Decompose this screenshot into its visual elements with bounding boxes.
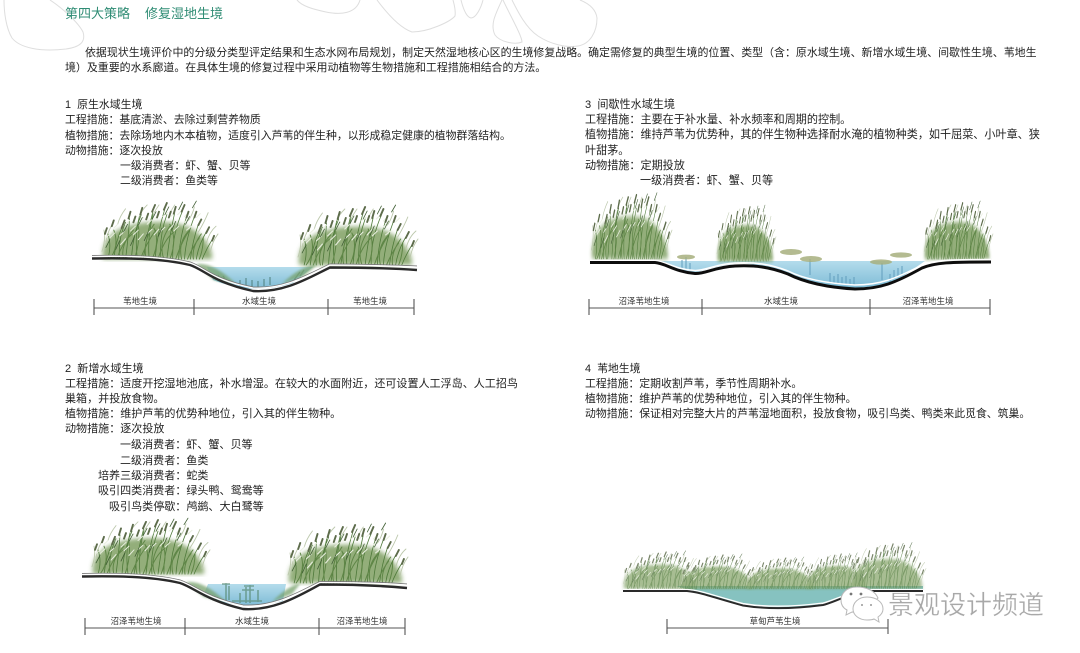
text block: section 2: 植物措施：维护芦苇的优势种地位，引入其的伴生物种。 — [65, 408, 341, 420]
text block: section 2: 二级消费者：鱼类 — [120, 455, 208, 467]
scale bar 1: 苇地生境 — [123, 296, 157, 306]
diagram 4: reed habitat section — [623, 542, 926, 634]
intro paragraph — [65, 46, 1037, 74]
text block: section 2 — [65, 362, 518, 513]
watermark: channel name: 景观设计频道 — [888, 590, 1044, 620]
scale bar 1: 水域生境 — [242, 296, 276, 306]
scale bar 2 — [85, 616, 405, 635]
scale bar 3: 沼泽苇地生境 — [902, 296, 954, 306]
text block: section 4: 植物措施：维护芦苇的优势种地位，引入其的伴生物种。 — [585, 393, 856, 405]
text block: section 3: 3 间歇性水域生境 — [585, 99, 675, 111]
text block: section 2: 吸引四类消费者：绿头鸭、鸳鸯等 — [98, 485, 264, 497]
reeds left 3 — [591, 193, 672, 259]
text block: section 3: 一级消费者：虾、蟹、贝等 — [640, 175, 773, 187]
reeds left bank 1 — [102, 201, 218, 259]
text block: section 4: 动物措施：保证相对完整大片的芦苇湿地面积，投放食物，吸引鸟类、鸭类来此觅食、筑巢。 — [585, 408, 1030, 420]
text block: section 3: 工程措施：主要在于补水量、补水频率和周期的控制。 — [585, 114, 851, 126]
submerged plants 3 — [682, 257, 902, 285]
ground line 3 — [590, 260, 991, 289]
ground line 1 — [92, 255, 417, 291]
ground line 4 — [623, 590, 923, 608]
scale bar 3: 沼泽苇地生境 — [618, 296, 670, 306]
scale bar 2: 沼泽苇地生境 — [110, 616, 162, 626]
text block: section 2: 工程措施：适度开挖湿地池底，补水增湿。在较大的水面附近，还可设置人工浮岛、人工招鸟 — [65, 378, 518, 390]
scale bar 4 — [667, 616, 888, 634]
reeds right bank 2 — [288, 523, 408, 583]
text block: section 2: 一级消费者：虾、蟹、贝等 — [120, 439, 253, 451]
reed belt 4 — [623, 542, 926, 589]
scale bar 1: 苇地生境 — [353, 296, 387, 306]
text block: section 1: 1 原生水域生境 — [65, 99, 142, 111]
lily pads 3 — [677, 249, 912, 265]
intro paragraph: 境）及重要的水系廊道。在具体生境的修复过程中采用动植物等生物措施和工程措施相结合的方法。 — [65, 62, 546, 74]
text block: section 1: 植物措施：去除场地内木本植物，适度引入芦苇的伴生种，以形成稳定健康的植物群落结构。 — [65, 130, 511, 142]
scale bar 2: 沼泽苇地生境 — [336, 616, 388, 626]
text block: section 1: 工程措施：基底清淤、去除过剩营养物质 — [65, 114, 261, 126]
text block: section 1 — [65, 98, 511, 187]
reeds middle 3 — [717, 205, 776, 261]
text block: section 2: 培养三级消费者：蛇类 — [98, 470, 208, 482]
reeds right 3 — [924, 201, 993, 259]
text block: section 2: 2 新增水域生境 — [65, 363, 144, 375]
reeds left bank 2 — [92, 518, 210, 574]
text block: section 3: 动物措施：定期投放 — [585, 160, 685, 172]
teal marsh water 4 — [676, 586, 923, 608]
text block: section 4: 工程措施：定期收割芦苇，季节性周期补水。 — [585, 378, 802, 390]
diagram 2: new water habitat section — [82, 518, 408, 635]
reeds right bank 1 — [298, 205, 418, 265]
text block: section 2: 吸引鸟类停歇：鸬鹚、大白鹭等 — [109, 501, 264, 513]
scale bar 4: 草甸芦苇生境 — [749, 616, 801, 626]
diagram 3: intermittent water habitat section — [589, 193, 993, 315]
text block: section 1: 动物措施：逐次投放 — [65, 145, 163, 157]
scale bar 1 — [94, 296, 414, 315]
text block: section 1: 二级消费者：鱼类等 — [120, 175, 218, 187]
islands and trees in water 2 — [222, 583, 262, 603]
text block: section 1: 一级消费者：虾、蟹、贝等 — [120, 160, 250, 172]
text block: section 3: 叶甜茅。 — [585, 145, 629, 157]
low waterside plants 1 — [196, 264, 318, 284]
background outline doodles — [4, 0, 597, 50]
text block: section 3 — [585, 98, 1040, 187]
low waterside plants 2 — [186, 582, 300, 602]
text block: section 2: 巢箱，并投放食物。 — [65, 393, 164, 405]
scale bar 3 — [589, 296, 990, 315]
text block: section 2: 动物措施：逐次投放 — [65, 423, 164, 435]
submerged plants 1 — [218, 270, 304, 287]
watermark: wechat icon — [841, 587, 883, 622]
ground line 2 — [82, 573, 407, 609]
intro paragraph: 依据现状生境评价中的分级分类型评定结果和生态水网布局规划，制定天然湿地核心区的生境修复战略。确定需修复的典型生境的位置、类型（含：原水域生境、新增水域生境、间歇性生境、苇地生 — [85, 47, 1037, 59]
text block: section 3: 植物措施：维持芦苇为优势种，其的伴生物种选择耐水淹的植物种类，如千屈菜、小叶章、狭 — [585, 129, 1040, 141]
scale bar 3: 水域生境 — [764, 296, 798, 306]
diagram 1: native water habitat section — [92, 201, 418, 315]
water body 3 — [660, 261, 925, 288]
text block: section 4 — [585, 362, 1030, 420]
text block: section 4: 4 苇地生境 — [585, 363, 641, 375]
water body 2 — [203, 584, 286, 605]
water body 1 — [207, 267, 313, 289]
scale bar 2: 水域生境 — [235, 616, 269, 626]
title: 第四大策略 修复湿地生境 — [65, 6, 223, 21]
